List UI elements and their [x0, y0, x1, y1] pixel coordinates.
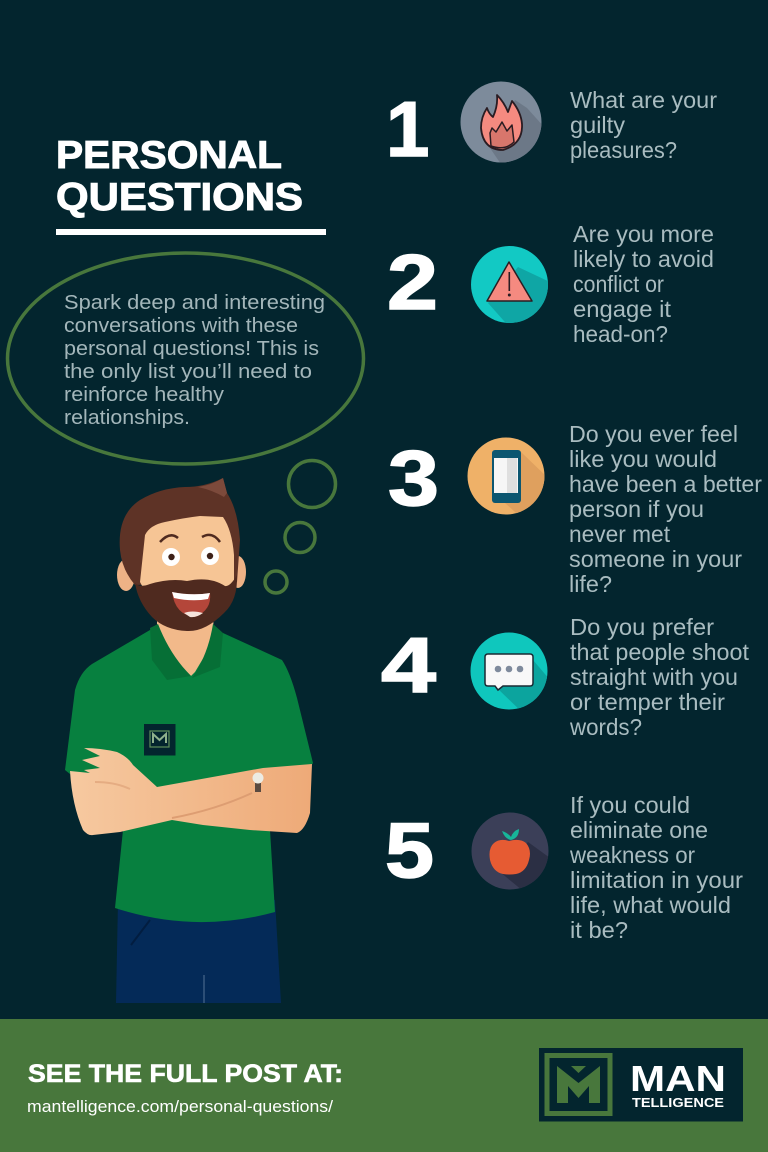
beard — [135, 575, 237, 631]
icon: flame — [460, 82, 542, 162]
title: PERSONAL — [56, 134, 282, 177]
number 1: 1 — [386, 85, 429, 173]
question 3: someone in your — [569, 546, 742, 572]
title: QUESTIONS — [56, 176, 303, 219]
question 4: that people shoot — [570, 639, 750, 665]
ears — [117, 559, 135, 591]
icon: smartphone — [468, 438, 544, 514]
icon: speech bubble — [470, 632, 550, 715]
question 5: If you could — [570, 792, 690, 818]
neck — [157, 612, 214, 676]
question 2: engage it — [573, 296, 672, 322]
question 1: pleasures? — [570, 137, 677, 163]
thought bubble with intro text: personal questions! This is — [64, 338, 319, 360]
thought bubble circles — [265, 460, 336, 593]
question 1: What are your — [570, 87, 717, 113]
hair — [120, 478, 240, 585]
collar — [150, 624, 191, 680]
logo — [539, 1048, 743, 1122]
footer band — [0, 1019, 768, 1152]
question 5: it be? — [570, 917, 628, 943]
shirt — [65, 630, 313, 922]
question 3: Do you ever feel — [569, 421, 738, 447]
footer url: mantelligence.com/personal-questions/ — [27, 1097, 333, 1116]
icon: warning triangle — [471, 246, 548, 323]
question 2: head-on? — [573, 321, 668, 347]
question 3: person if you — [569, 496, 704, 522]
thought bubble with intro text: relationships. — [64, 407, 190, 429]
shirt logo — [144, 724, 176, 756]
question 3: have been a better — [569, 471, 762, 497]
question 3 — [569, 421, 762, 597]
question 5: life, what would — [570, 892, 731, 918]
footer heading: SEE THE FULL POST AT: — [28, 1060, 343, 1088]
mouth — [172, 592, 210, 617]
number 3: 3 — [388, 434, 439, 522]
question 4 — [569, 614, 750, 740]
question 2: likely to avoid — [573, 246, 714, 272]
question 1: guilty — [570, 112, 626, 138]
question 4: Do you prefer — [570, 614, 714, 640]
logo: TELLIGENCE — [632, 1095, 724, 1110]
crossed arms — [70, 748, 312, 835]
thought bubble with intro text: Spark deep and interesting — [64, 292, 325, 314]
question 5: limitation in your — [570, 867, 743, 893]
question 2: conflict or — [573, 271, 664, 297]
face — [140, 516, 234, 620]
question 5 — [569, 792, 743, 943]
eyebrows — [160, 535, 178, 542]
trousers — [116, 900, 281, 1003]
question 3: like you would — [569, 446, 717, 472]
number 4: 4 — [381, 621, 436, 709]
question 4: words? — [569, 714, 642, 740]
question 2: Are you more — [573, 221, 714, 247]
number 2: 2 — [387, 238, 438, 326]
question 3: never met — [569, 521, 671, 547]
question 2 — [573, 221, 714, 347]
question 1 — [570, 87, 717, 163]
thought bubble with intro text: reinforce healthy — [64, 384, 224, 406]
thought bubble with intro text: the only list you’ll need to — [64, 361, 312, 383]
question 4: straight with you — [570, 664, 738, 690]
thought bubble with intro text — [8, 253, 364, 464]
thought bubble with intro text: conversations with these — [64, 315, 298, 337]
question 5: eliminate one — [570, 817, 708, 843]
question 4: or temper their — [570, 689, 725, 715]
question 5: weakness or — [569, 842, 695, 868]
eyes — [162, 548, 180, 566]
number 5: 5 — [385, 806, 434, 894]
icon: apple — [472, 812, 550, 895]
character: man with crossed arms — [65, 478, 313, 1003]
question 3: life? — [569, 571, 612, 597]
watch — [255, 783, 261, 792]
logo: MAN — [630, 1058, 726, 1099]
title — [56, 134, 326, 235]
